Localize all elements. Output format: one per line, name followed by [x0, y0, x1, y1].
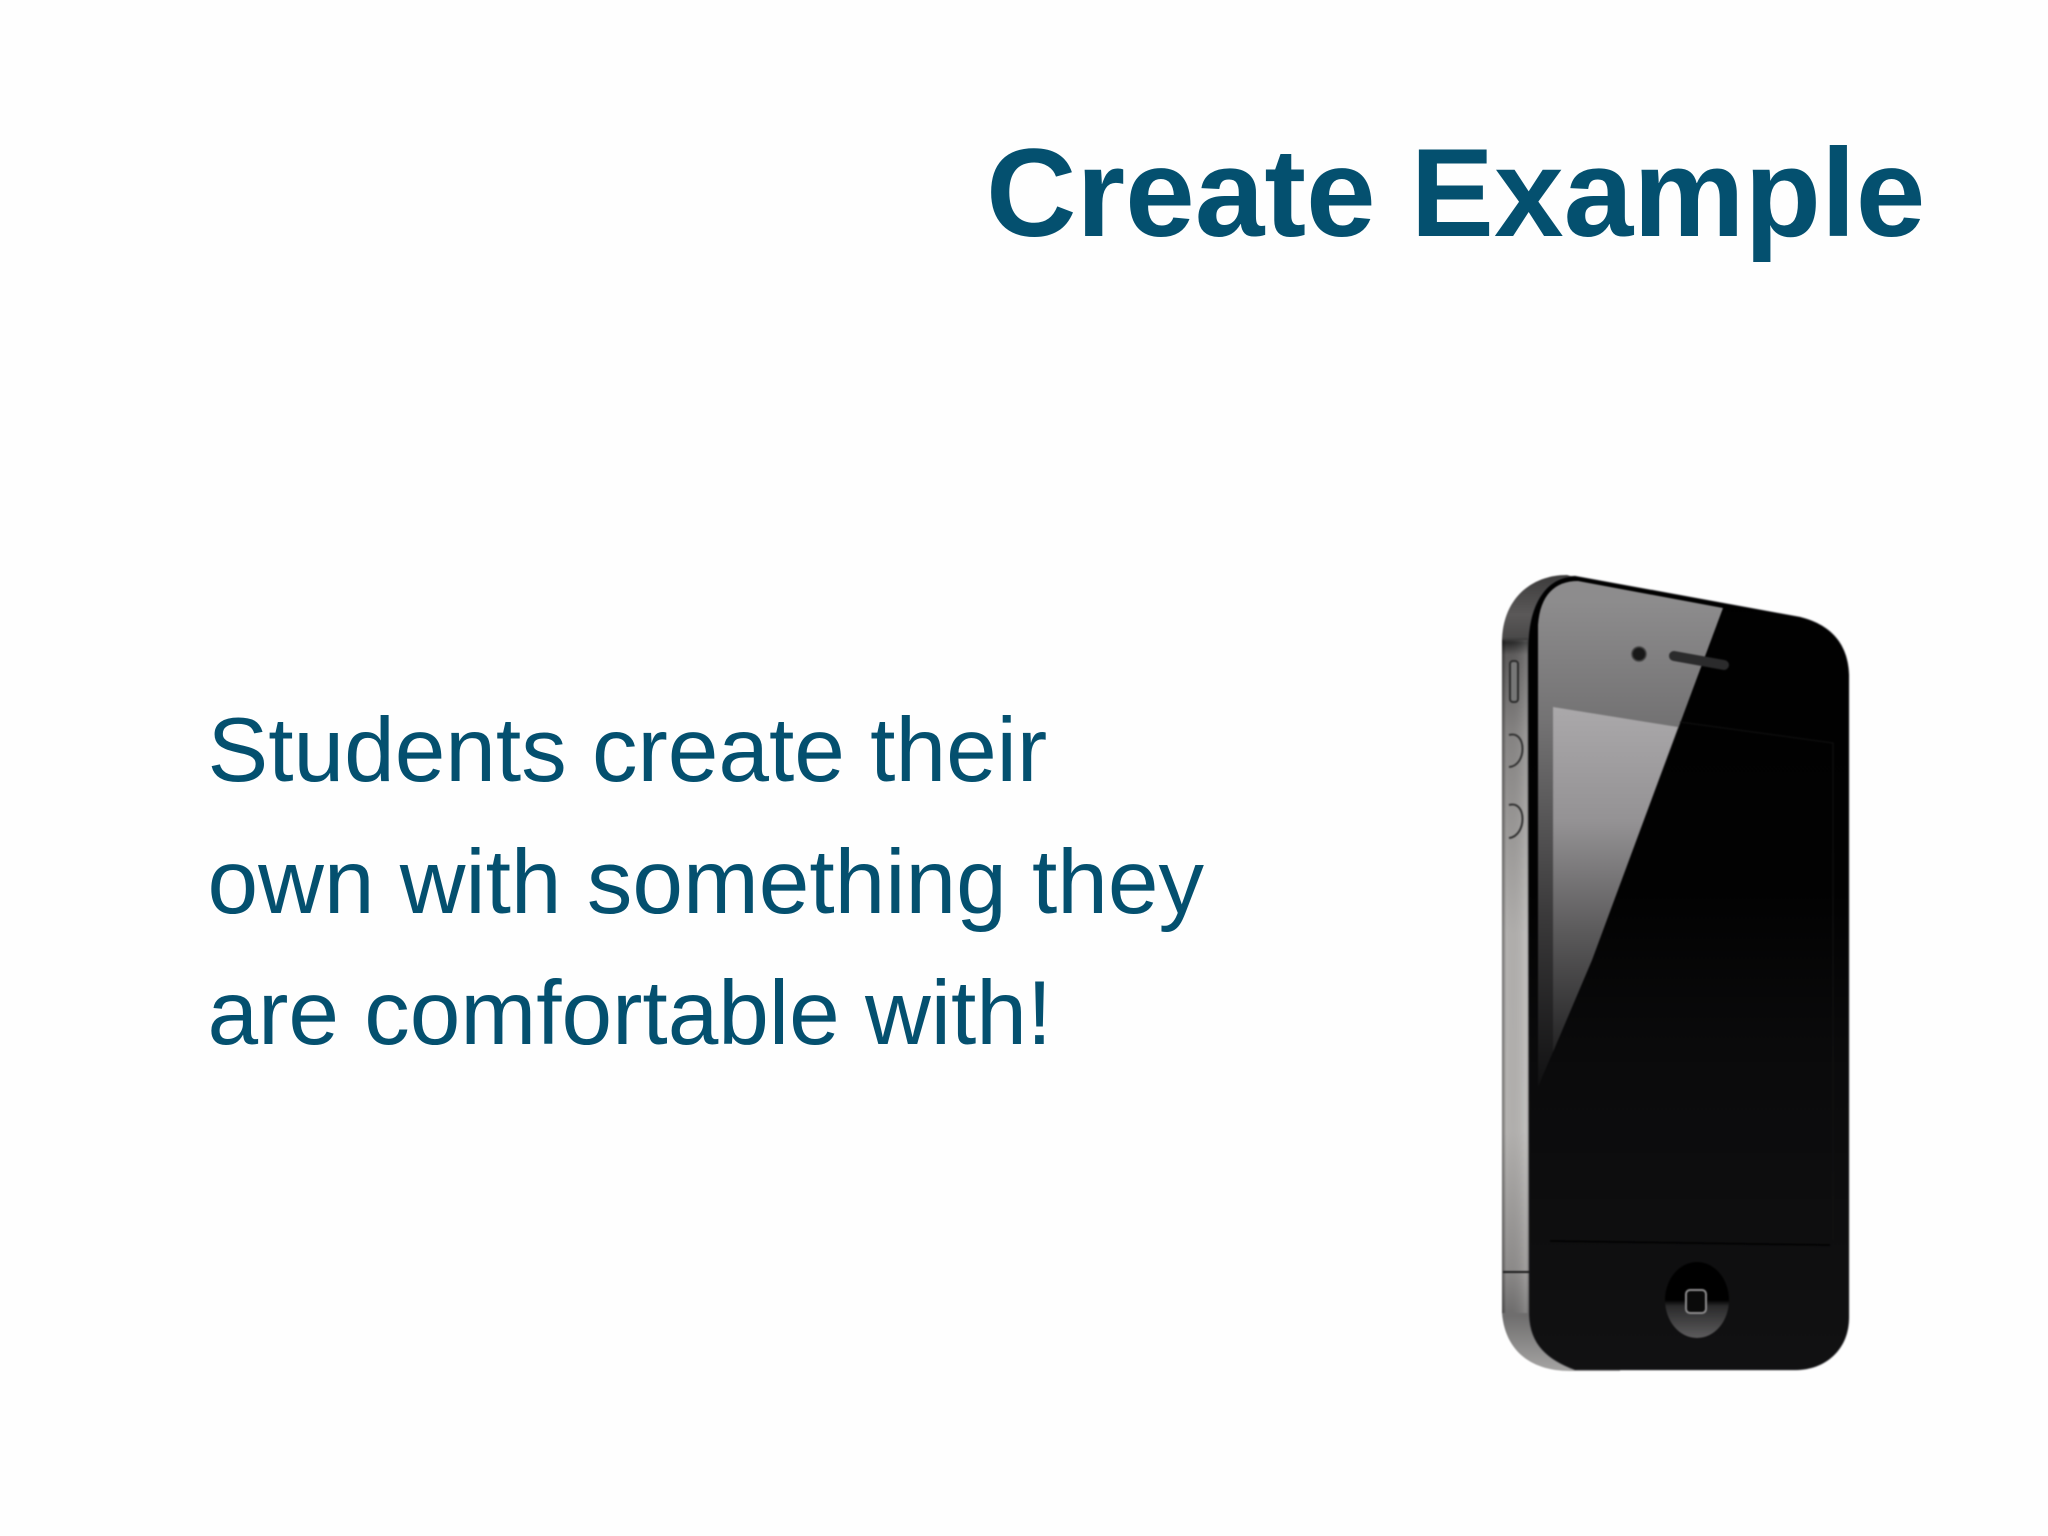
title: Create Example: [986, 123, 1925, 263]
phone glass reflection: [1538, 581, 1723, 1087]
body text: [208, 700, 1204, 1064]
body text: own with something they: [208, 832, 1204, 933]
body text: Students create their: [208, 700, 1047, 801]
phone home button: [1665, 1262, 1729, 1338]
phone mute switch: [1510, 661, 1518, 702]
phone front face: [1528, 576, 1849, 1370]
phone volume buttons: [1509, 735, 1522, 838]
phone speaker: [1674, 656, 1724, 665]
phone metal side band: [1502, 575, 1620, 1371]
body text: are comfortable with!: [208, 963, 1052, 1064]
icon: smartphone: [1502, 575, 1849, 1371]
phone camera: [1632, 647, 1646, 661]
phone screen reflection: [1553, 707, 1678, 1052]
